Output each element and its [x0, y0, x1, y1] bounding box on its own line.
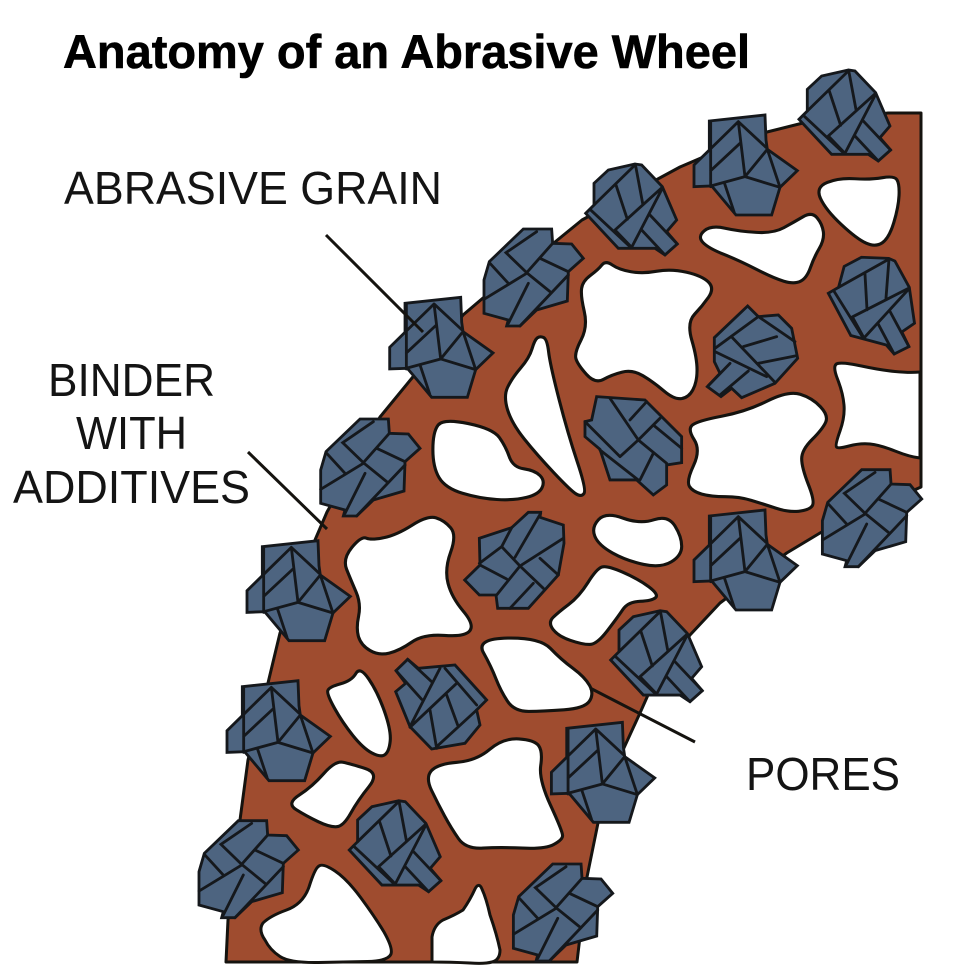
pore 3 [576, 263, 712, 399]
grain 8 [585, 397, 682, 495]
grain 12 [694, 510, 797, 610]
binder body [226, 113, 921, 962]
grain 13 [465, 512, 564, 608]
grain 18 [199, 821, 298, 918]
grain 14 [611, 611, 702, 702]
grain 1 [799, 70, 891, 161]
pore 9 [594, 515, 682, 566]
pore 12 [328, 671, 390, 756]
pore 5 [433, 421, 543, 500]
grain 10 [247, 541, 350, 641]
label: binder with additives: BINDER [48, 354, 215, 406]
pore 14 [428, 739, 563, 848]
pore 11 [482, 638, 592, 711]
leader: pores [590, 688, 695, 742]
grain 5 [390, 297, 493, 397]
leader: abrasive grain [326, 235, 423, 332]
label: binder with additives: ADDITIVES [13, 461, 250, 513]
grain 17 [551, 722, 655, 822]
grain 3 [586, 164, 677, 255]
label: pores: PORES [746, 748, 900, 800]
grain 15 [396, 659, 487, 749]
leader: binder [248, 452, 327, 529]
pore 6 [835, 363, 920, 458]
pore 7 [688, 393, 826, 511]
pore 4 [505, 337, 585, 495]
grain 9 [321, 419, 420, 516]
title: Anatomy of an Abrasive Wheel [63, 25, 750, 78]
grain 11 [822, 470, 922, 567]
label: binder with additives [13, 354, 250, 513]
pore 15 [261, 865, 391, 963]
grain 16 [227, 681, 330, 781]
pore 16 [432, 885, 500, 963]
label: abrasive grain: ABRASIVE GRAIN [64, 162, 442, 214]
grain 20 [513, 864, 613, 961]
grain 7 [707, 306, 798, 398]
pore 1 [819, 177, 899, 245]
grain 19 [349, 801, 441, 892]
label: binder with additives: WITH [76, 407, 187, 459]
grain 2 [694, 115, 797, 215]
panel: abrasive wheel cross-section [199, 70, 930, 963]
pore 10 [550, 567, 656, 644]
pore 2 [700, 214, 824, 283]
grain 6 [818, 246, 930, 357]
pore 8 [345, 517, 471, 654]
pore 13 [292, 762, 374, 827]
grain 4 [484, 229, 583, 326]
